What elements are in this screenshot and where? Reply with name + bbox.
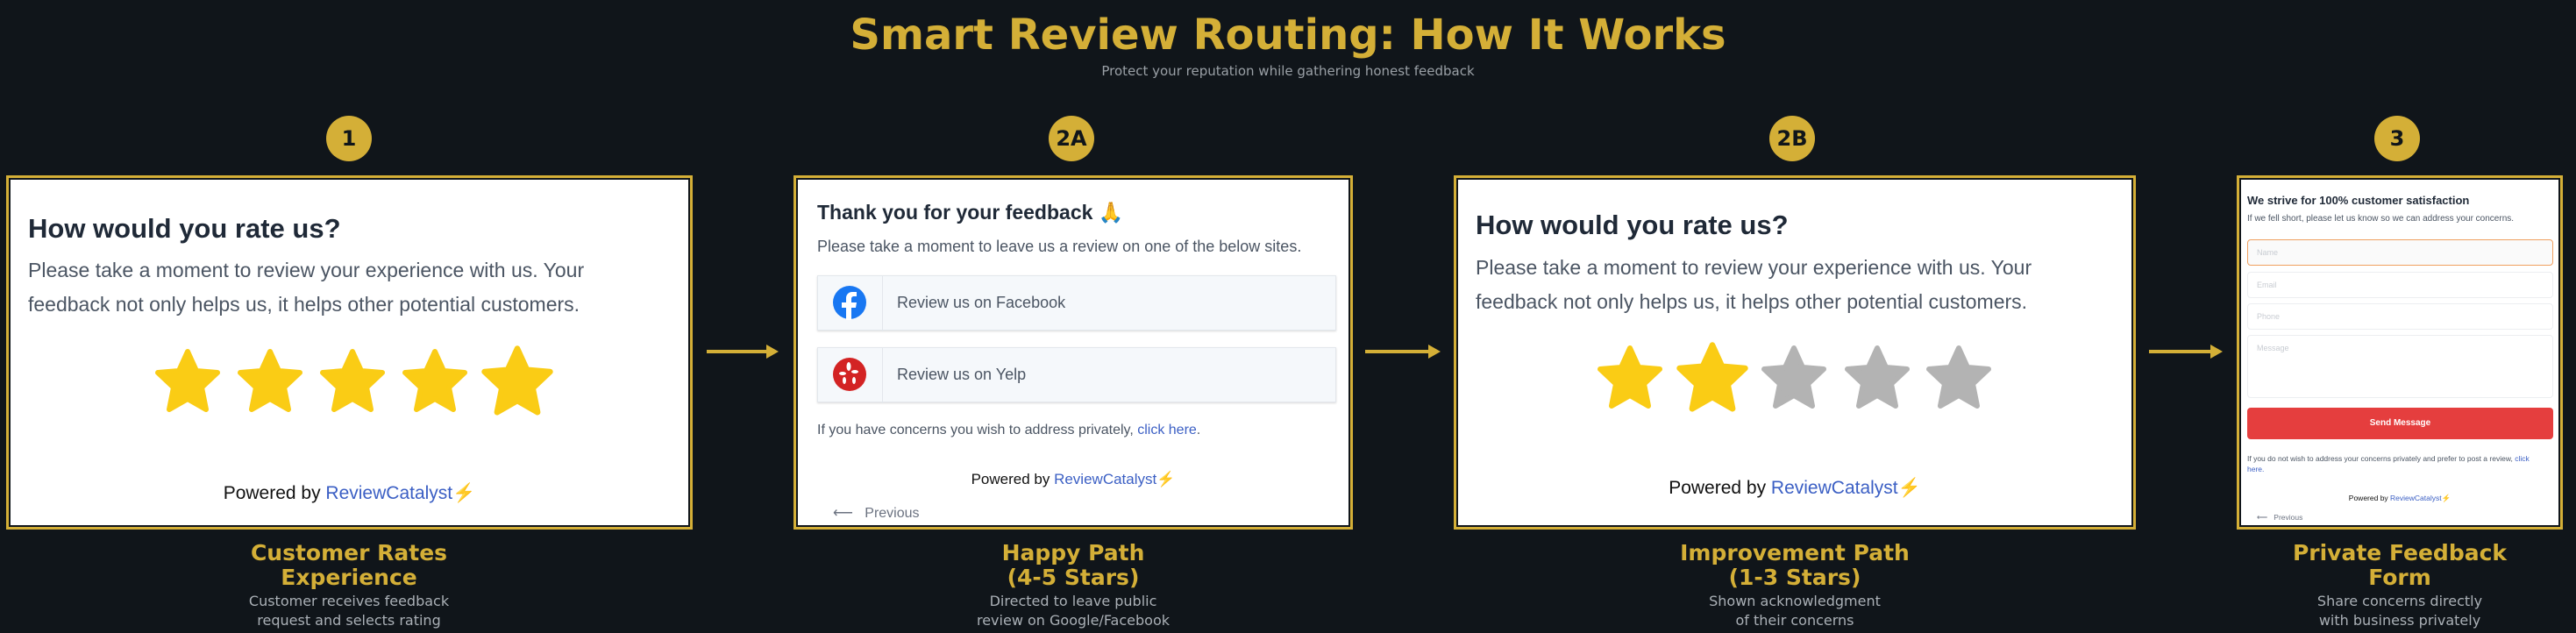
- powered by: Powered by ReviewCatalyst⚡: [224, 483, 475, 503]
- caption 1: Experience: [281, 565, 417, 590]
- email field: Email: [2257, 281, 2277, 289]
- body text: Please take a moment to leave us a review on one of the below sites.: [817, 238, 1301, 255]
- stars: 5 gold: [155, 345, 553, 416]
- caption 1: [249, 540, 449, 629]
- arrow 1: [707, 345, 779, 359]
- subtext: If we fell short, please let us know so we can address your concerns.: [2247, 214, 2514, 224]
- stars: 2 gold, 3 grey: [1598, 342, 1991, 412]
- step badge 1: 1: [342, 126, 356, 151]
- caption 2B: [1680, 540, 1910, 629]
- previous link: ⟵ Previous: [833, 506, 920, 521]
- name field: Name: [2257, 248, 2278, 257]
- panel: improvement path: [1454, 175, 2136, 530]
- panel: rating screen: [6, 175, 693, 530]
- icon: yelp: [833, 358, 866, 391]
- caption 3: Private Feedback: [2293, 540, 2507, 565]
- heading: Thank you for your feedback 🙏: [817, 201, 1123, 224]
- caption 2A: [977, 540, 1170, 629]
- icon: facebook: [833, 286, 866, 320]
- send button: Send Message: [2370, 418, 2430, 428]
- previous link: ⟵ Previous: [2257, 513, 2302, 522]
- heading: How would you rate us?: [1476, 210, 1789, 240]
- subtitle: Protect your reputation while gathering honest feedback: [1101, 63, 1475, 79]
- step badge 3: 3: [2390, 126, 2404, 151]
- send button: [2247, 408, 2553, 439]
- facebook button: Review us on Facebook: [897, 294, 1065, 311]
- caption 3: Share concerns directly: [2317, 593, 2482, 609]
- caption 2A: Directed to leave public: [990, 593, 1156, 609]
- heading: We strive for 100% customer satisfaction: [2247, 194, 2469, 207]
- caption 2B: Improvement Path: [1680, 540, 1910, 565]
- yelp button: Review us on Yelp: [897, 366, 1026, 383]
- body text: Please take a moment to review your experience with us. Your feedback not only helps us, it helps other potential customers.: [28, 259, 584, 316]
- step badge 2A: 2A: [1056, 126, 1087, 151]
- panel: happy path: [793, 175, 1353, 530]
- caption 3: [2293, 540, 2508, 629]
- caption 1: Customer Rates: [251, 540, 447, 565]
- caption 2A: Happy Path: [1002, 540, 1144, 565]
- step badge 2B: 2B: [1776, 126, 1808, 151]
- public review text: If you do not wish to address your concerns privately and prefer to post a review, click here.: [2247, 454, 2530, 473]
- message field: Message: [2257, 344, 2289, 352]
- phone field: [2247, 303, 2553, 330]
- caption 2B: of their concerns: [1735, 612, 1854, 629]
- arrow 3: [2149, 345, 2223, 359]
- private concerns text: If you have concerns you wish to address privately, click here.: [817, 423, 1200, 437]
- step badge 2B: [1769, 116, 1815, 161]
- caption 2B: (1-3 Stars): [1729, 565, 1861, 590]
- name field: [2247, 239, 2553, 266]
- message field: [2247, 335, 2553, 398]
- step badge 2A: [1049, 116, 1094, 161]
- caption 2A: (4-5 Stars): [1007, 565, 1139, 590]
- caption 1: request and selects rating: [257, 612, 441, 629]
- step badge 1: [326, 116, 372, 161]
- phone field: Phone: [2257, 312, 2280, 321]
- title: Smart Review Routing: How It Works: [850, 11, 1726, 60]
- powered by: Powered by ReviewCatalyst⚡: [1669, 478, 1921, 498]
- caption 3: with business privately: [2319, 612, 2480, 629]
- caption 3: Form: [2368, 565, 2431, 590]
- powered by: Powered by ReviewCatalyst⚡: [971, 471, 1175, 487]
- step badge 3: [2374, 116, 2420, 161]
- email field: [2247, 272, 2553, 298]
- powered by: Powered by ReviewCatalyst⚡: [2349, 494, 2451, 502]
- caption 2B: Shown acknowledgment: [1709, 593, 1881, 609]
- heading: How would you rate us?: [28, 213, 341, 244]
- body text: Please take a moment to review your experience with us. Your feedback not only helps us, it helps other potential customers.: [1476, 256, 2032, 313]
- arrow 2: [1365, 345, 1441, 359]
- caption 2A: review on Google/Facebook: [977, 612, 1170, 629]
- caption 1: Customer receives feedback: [249, 593, 449, 609]
- facebook button: [817, 275, 1336, 331]
- panel: private feedback form: [2237, 175, 2563, 530]
- yelp button: [817, 347, 1336, 402]
